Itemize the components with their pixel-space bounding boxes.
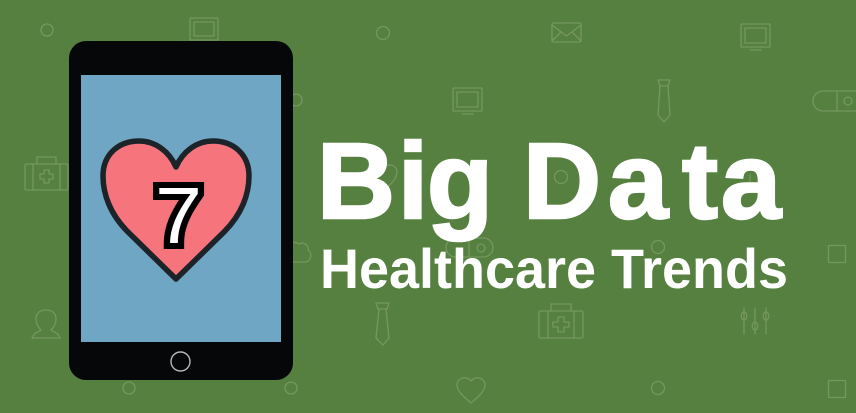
icon: sliders xyxy=(741,308,769,334)
tablet screen xyxy=(81,75,281,342)
subtitle: Healthcare Trends xyxy=(320,237,788,300)
icon: tie bottom xyxy=(376,303,389,345)
title: Big Data xyxy=(317,120,782,241)
icon: circle bottom near tablet xyxy=(285,382,297,394)
icon: square right xyxy=(828,246,846,262)
tablet body xyxy=(69,41,293,380)
icon: monitor top right xyxy=(741,24,770,50)
icon: pill xyxy=(813,91,856,111)
icon: monitor behind tablet xyxy=(190,18,218,40)
icon: heart xyxy=(103,141,249,279)
icon: circle behind D xyxy=(554,170,568,184)
icon: medical kit left xyxy=(25,157,68,190)
icon: circle behind subtitle xyxy=(652,240,664,254)
icon: square bottom right xyxy=(828,380,846,398)
icon: circle top xyxy=(376,26,390,40)
icon: cloud xyxy=(282,242,311,262)
icon: tie top xyxy=(658,80,670,122)
number 7: 7 xyxy=(155,171,202,260)
icon: envelope xyxy=(552,23,581,42)
icon: medical kit centre xyxy=(539,304,583,338)
icon: circle behind tablet xyxy=(290,94,302,106)
icon: monitor centre xyxy=(453,88,482,114)
home button xyxy=(171,352,190,371)
icon: circle bottom xyxy=(652,382,664,394)
icon: circle bottom left xyxy=(123,382,135,394)
tablet xyxy=(69,41,293,380)
icon: person xyxy=(32,310,60,338)
icon: circle top left xyxy=(41,24,53,36)
icon: pill behind subtitle xyxy=(446,238,493,257)
icon: square behind a xyxy=(750,175,761,185)
icon: heart behind title xyxy=(367,165,397,192)
icon: heart bottom xyxy=(457,378,485,403)
